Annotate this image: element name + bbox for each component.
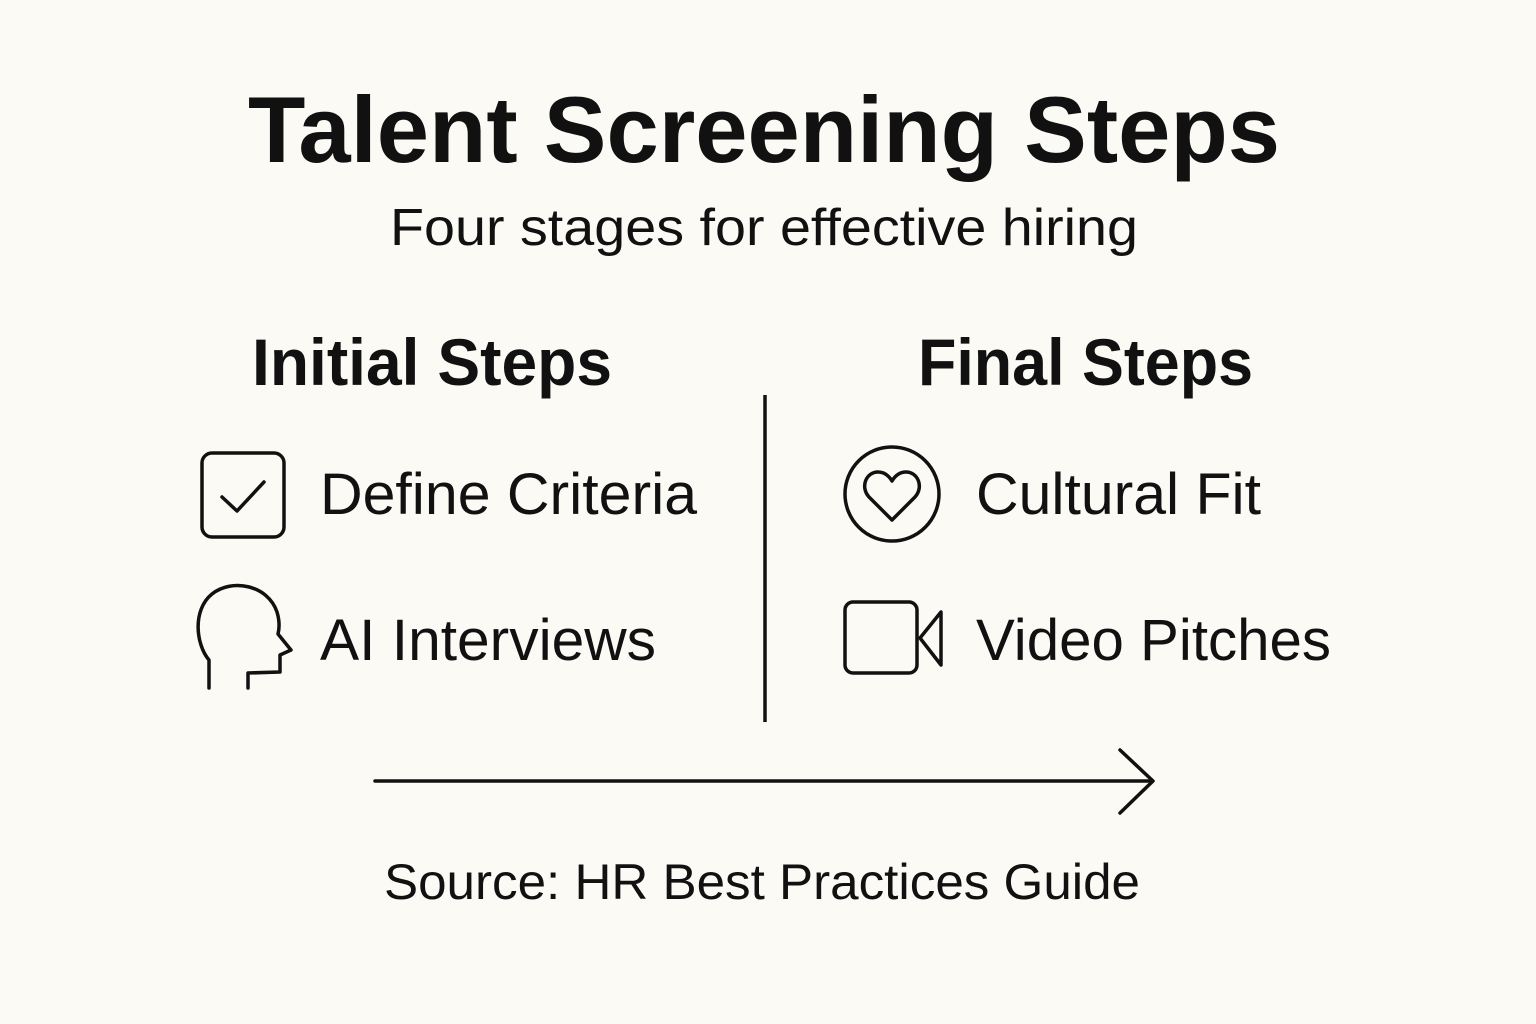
subtitle: Four stages for effective hiring (390, 199, 1138, 257)
item: Cultural Fit: Cultural Fit (976, 462, 1261, 527)
title: Talent Screening Steps (248, 77, 1280, 182)
heading: Initial Steps: Initial Steps (252, 325, 612, 399)
item: Define Criteria: Define Criteria (320, 462, 698, 527)
icon: checkbox (202, 453, 284, 537)
item: Video Pitches: Video Pitches (976, 608, 1331, 673)
item: AI Interviews: AI Interviews (320, 608, 656, 673)
icon: video camera (845, 602, 941, 673)
divider (763, 395, 767, 722)
arrow (375, 750, 1153, 813)
source: Source: HR Best Practices Guide (384, 854, 1140, 910)
icon: heart circle (845, 447, 939, 541)
heading: Final Steps: Final Steps (918, 325, 1253, 399)
icon: head (198, 586, 291, 688)
